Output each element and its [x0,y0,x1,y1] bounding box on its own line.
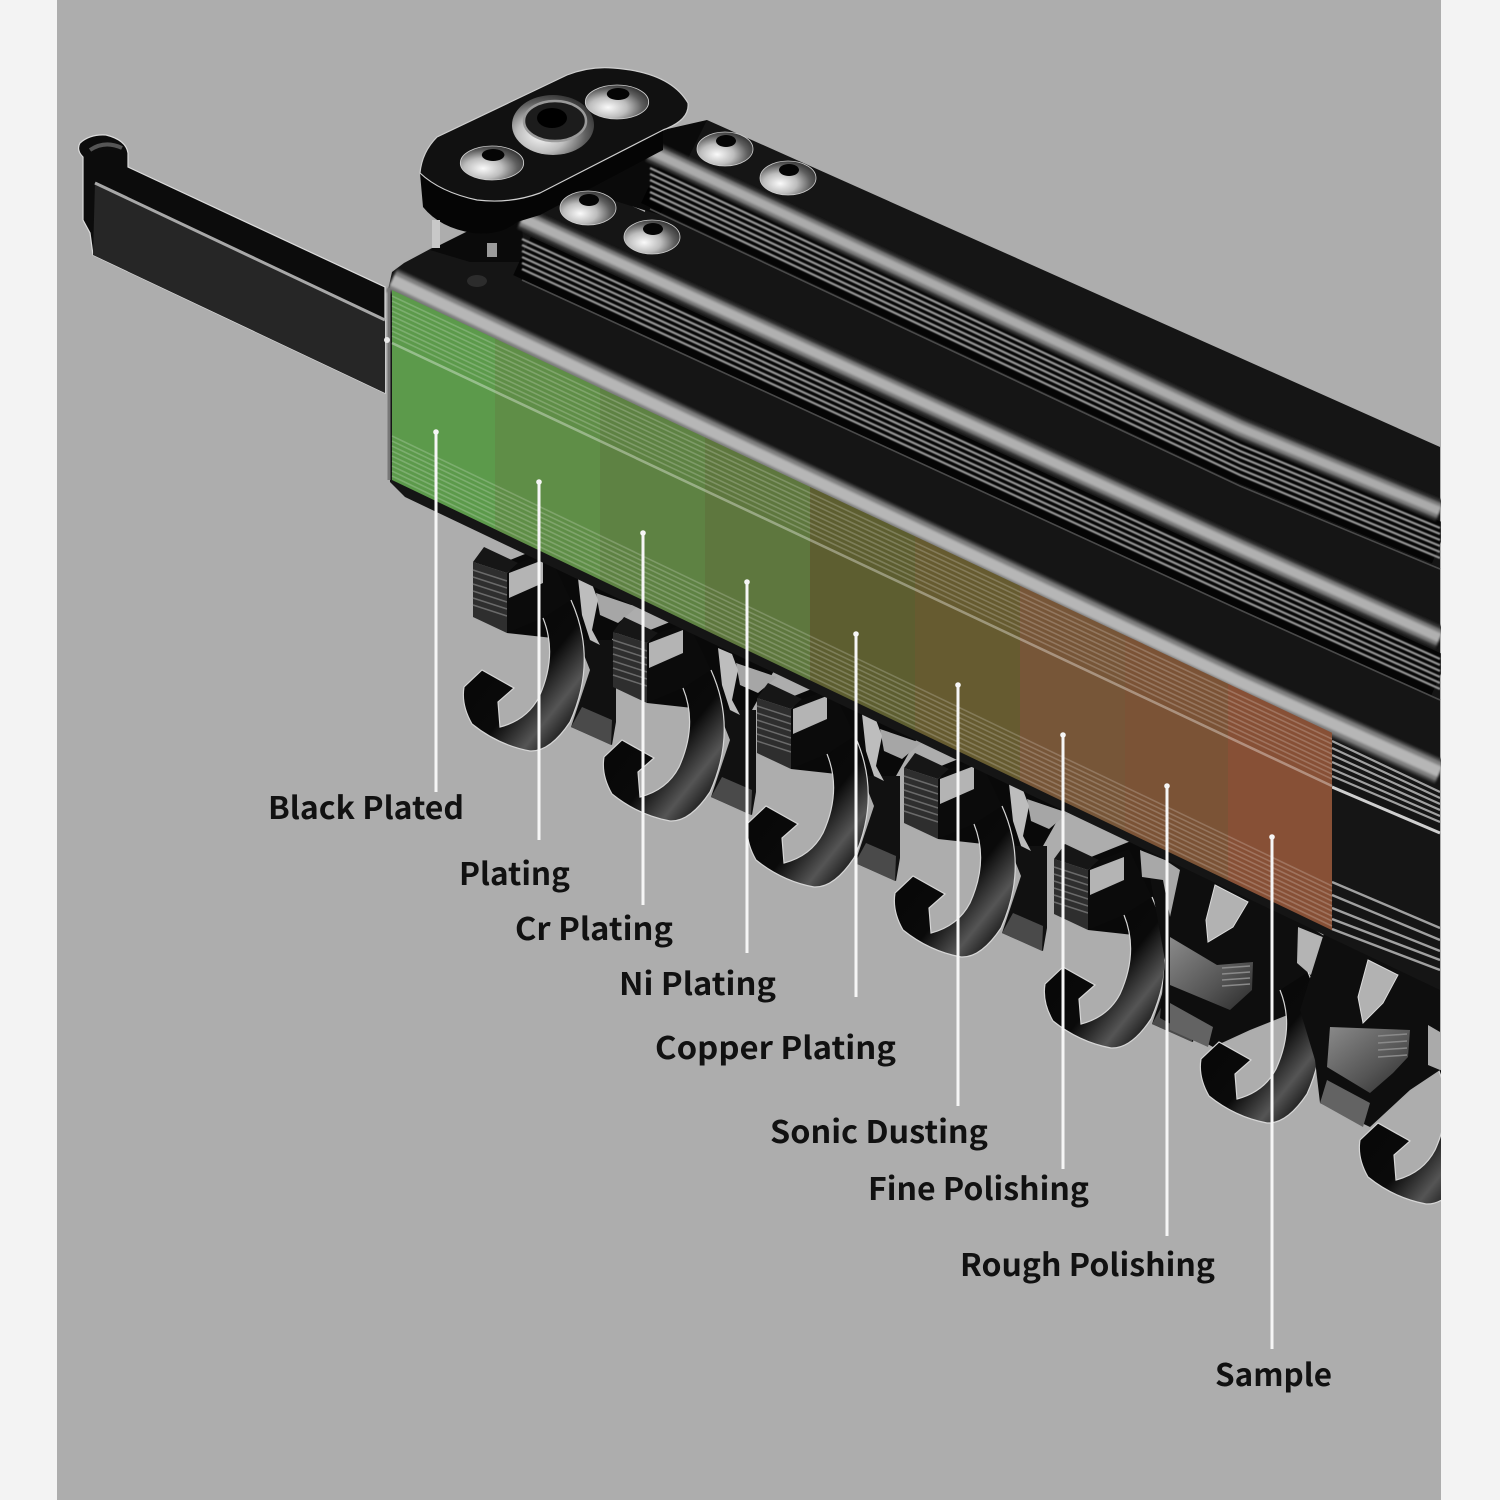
layer: rough polishing [1125,635,1228,880]
rail 3 faint rib [650,209,1440,569]
leader lines [433,429,1275,1349]
hook 6 ring [1200,972,1321,1123]
plate centre bolt [512,95,594,155]
rail screws [560,132,816,254]
layer: Ni plating [705,437,810,680]
label: Sonic Dusting: Sonic Dusting [770,1107,988,1152]
rail 2 ribs [522,256,1440,676]
leader: sample [1269,834,1275,1349]
rail 3 silver edge [650,151,1440,511]
leader: black plated [433,429,439,792]
plate screw left [460,146,524,180]
leader: Cr plating [640,530,646,905]
label: Sample: Sample [1215,1350,1332,1395]
leader: plating [536,479,542,840]
hook 7 ring [1358,1070,1441,1205]
rail 2 screw b [624,220,680,254]
band ribs [392,296,1332,926]
layer: copper plating [810,487,915,730]
label: Black Plated: Black Plated [268,783,464,828]
rail body [384,120,1440,990]
leader: Ni plating [744,579,750,953]
label: Plating: Plating [459,849,570,894]
layer: plating [495,338,600,580]
plating colour band [392,290,1332,930]
rail 3 screw a [697,132,753,166]
curtain hooks row [463,540,1480,1204]
leader: rough polishing [1164,783,1170,1236]
hook 1 [463,540,640,751]
label: Fine Polishing: Fine Polishing [868,1164,1089,1209]
main rail silver edge [392,280,1440,772]
telescopic arm [79,135,385,393]
hook 3 [747,676,924,887]
ribs on black end section [1332,741,1440,822]
rail 2 faint rib [522,280,1440,700]
label: Copper Plating: Copper Plating [655,1023,896,1068]
mounting plate [420,68,688,248]
mount post [487,243,497,257]
rail 2 silver edge [522,218,1440,638]
leader: sonic dusting [955,682,961,1106]
hook 5 [1044,842,1194,1049]
hook 7 carrier [1300,930,1440,1127]
label: Ni Plating: Ni Plating [619,959,776,1004]
hook 4 [894,746,1071,957]
rail 2 screw a [560,191,616,225]
label: Cr Plating: Cr Plating [515,904,673,949]
layer: sample [1228,684,1332,930]
plate screw right [585,85,649,119]
leader: copper plating [853,631,859,997]
leader: fine polishing [1060,732,1066,1169]
hook 6 carrier [1140,850,1330,1047]
layer: Cr plating [600,388,705,630]
left edge trim [388,288,390,480]
layer: fine polishing [1020,586,1125,831]
rail 3 screw b [760,161,816,195]
layer: black plated [392,290,495,529]
hook 2 [603,610,780,821]
rail 3 ribs [650,184,1440,544]
layer: sonic dusting [915,536,1020,781]
rail mark [467,275,487,287]
label: Rough Polishing: Rough Polishing [960,1240,1215,1285]
